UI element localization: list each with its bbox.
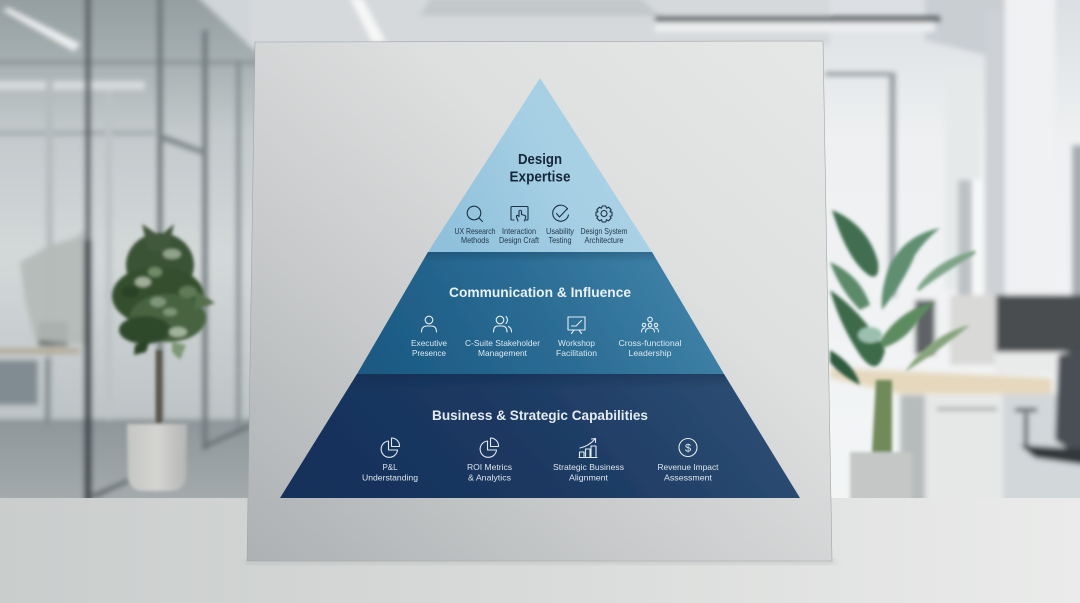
label: ROI Metrics & Analytics: ROI Metrics bbox=[467, 462, 512, 472]
label: Usability Testing: Usability bbox=[546, 226, 575, 236]
left glass office wall bbox=[0, 0, 265, 514]
icon: gear bbox=[596, 206, 612, 222]
icon: team bbox=[642, 317, 658, 332]
label: Design System Architecture bbox=[580, 226, 628, 245]
label: ROI Metrics & Analytics: & Analytics bbox=[468, 472, 511, 482]
icon: magnifier bbox=[467, 206, 482, 222]
label: UX Research Methods bbox=[454, 226, 496, 245]
label: P&L Understanding: Understanding bbox=[362, 472, 418, 482]
label: Workshop Facilitation bbox=[556, 338, 597, 358]
right bright office bbox=[820, 0, 1080, 510]
right plant bbox=[830, 210, 975, 505]
icon: pie chart one bbox=[381, 438, 400, 457]
heading: Business & Strategic Capabilities: Business & Strategic Capabilities bbox=[432, 407, 648, 423]
panel shadow bbox=[245, 560, 835, 564]
heading: Design Expertise bbox=[510, 152, 570, 186]
label: Workshop Facilitation: Facilitation bbox=[556, 348, 597, 358]
label: Cross-functional Leadership bbox=[618, 338, 682, 358]
table top bbox=[0, 498, 1080, 603]
label: P&L Understanding bbox=[362, 462, 418, 482]
icon: pie chart two bbox=[480, 438, 499, 457]
label: Interaction Design Craft: Interaction bbox=[502, 226, 536, 236]
icon: person bbox=[422, 316, 436, 332]
icon: growth bars bbox=[579, 438, 597, 458]
icon: interaction touch bbox=[511, 206, 528, 221]
display panel bbox=[247, 41, 832, 561]
label: Executive Presence bbox=[411, 338, 447, 358]
label: Revenue Impact Assessment bbox=[658, 462, 719, 482]
icon: dollar coin: $ bbox=[685, 442, 691, 454]
label: Usability Testing bbox=[546, 226, 575, 245]
label: Interaction Design Craft bbox=[499, 226, 540, 245]
label: Strategic Business Alignment: Strategic Business bbox=[553, 462, 624, 472]
label: Strategic Business Alignment bbox=[553, 462, 624, 482]
label: C-Suite Stakeholder Management: Management bbox=[478, 348, 528, 358]
label: Strategic Business Alignment: Alignment bbox=[569, 472, 609, 482]
heading: Design Expertise: Design bbox=[518, 152, 562, 168]
left plant bbox=[112, 224, 215, 491]
icon: usability check bbox=[553, 205, 568, 221]
heading: Communication & Influence: Communication & Influence bbox=[449, 284, 631, 300]
label: Executive Presence: Presence bbox=[412, 348, 446, 358]
label: Design System Architecture: Architecture bbox=[584, 235, 624, 245]
icon: two people bbox=[494, 316, 512, 332]
label: Interaction Design Craft: Design Craft bbox=[499, 235, 540, 245]
label: Workshop Facilitation: Workshop bbox=[558, 338, 595, 348]
label: Design System Architecture: Design System bbox=[580, 226, 628, 236]
centre ceiling strip bbox=[250, 0, 940, 45]
label: Cross-functional Leadership: Cross-functional bbox=[618, 338, 682, 348]
icon: presentation board bbox=[568, 317, 585, 334]
icon: dollar coin bbox=[679, 438, 697, 456]
label: Usability Testing: Testing bbox=[548, 235, 572, 245]
label: Revenue Impact Assessment: Revenue Impact bbox=[658, 462, 719, 472]
tier: Communication & Influence bbox=[357, 252, 724, 374]
label: C-Suite Stakeholder Management: C-Suite Stakeholder bbox=[465, 338, 540, 348]
label: P&L Understanding: P&L bbox=[382, 462, 398, 472]
label: C-Suite Stakeholder Management bbox=[465, 338, 540, 358]
label: Executive Presence: Executive bbox=[411, 338, 447, 348]
tier: Business & Strategic Capabilities bbox=[280, 374, 800, 498]
label: Cross-functional Leadership: Leadership bbox=[628, 348, 672, 358]
pyramid bbox=[280, 78, 800, 498]
label: Revenue Impact Assessment: Assessment bbox=[664, 472, 713, 482]
label: UX Research Methods: Methods bbox=[461, 235, 489, 245]
tier: Design Expertise bbox=[428, 78, 652, 252]
label: UX Research Methods: UX Research bbox=[454, 226, 496, 236]
heading: Design Expertise: Expertise bbox=[510, 170, 570, 186]
label: ROI Metrics & Analytics bbox=[467, 462, 512, 482]
